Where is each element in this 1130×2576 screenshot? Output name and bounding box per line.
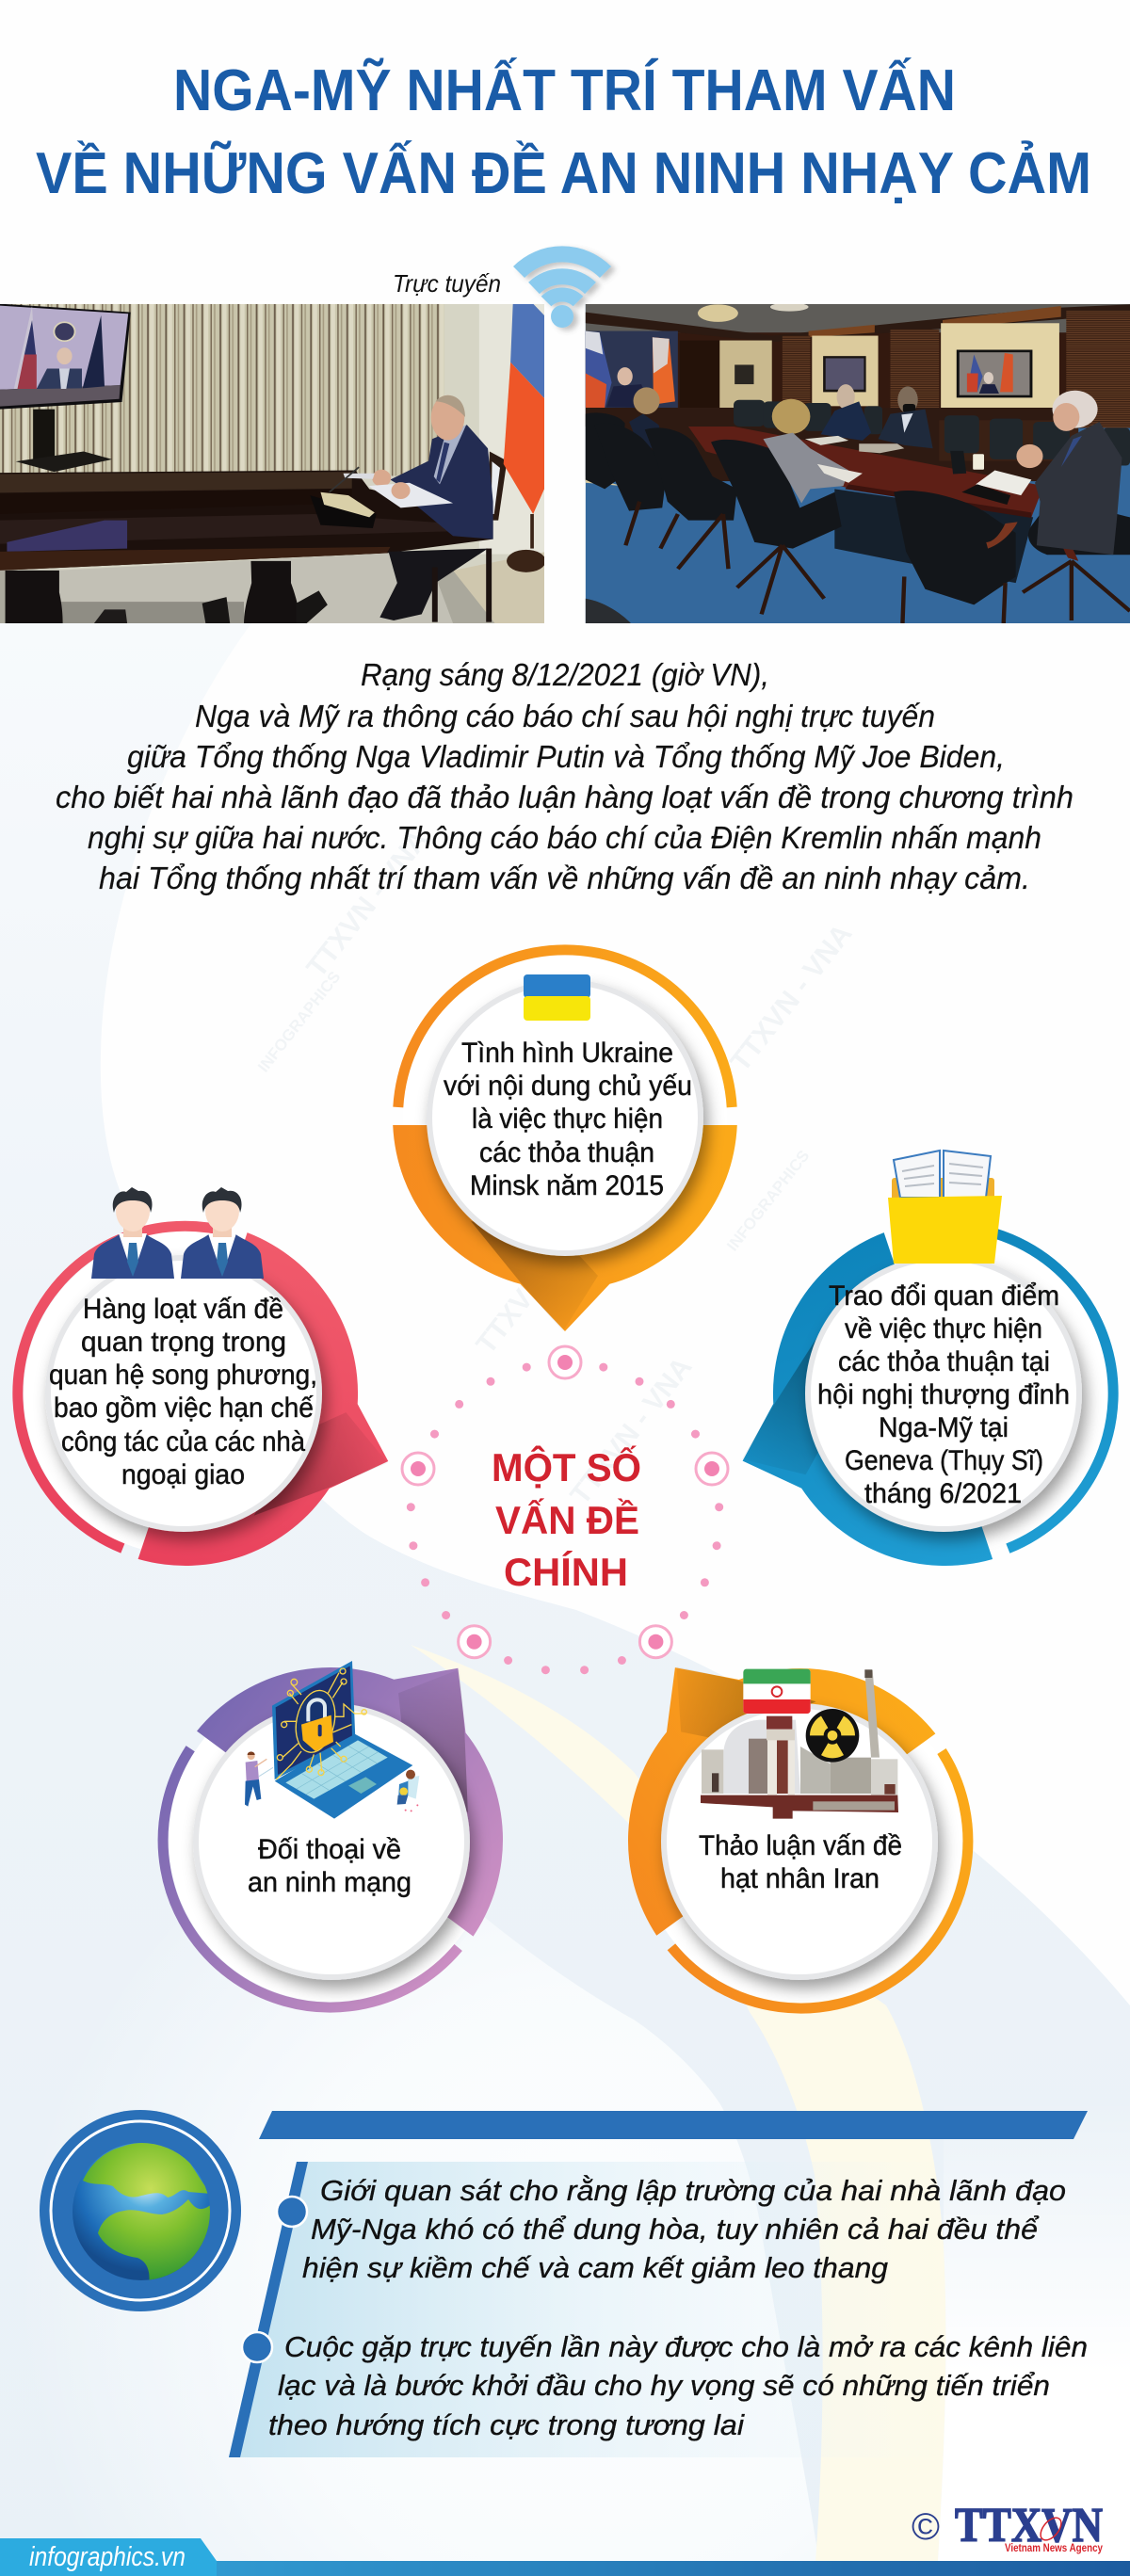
central heading — [492, 1444, 641, 1594]
icon: nuclear plant, Iran flag and radiation sign — [701, 1668, 898, 1819]
text: Ukraine topic: với nội dung chủ yếu — [444, 1071, 692, 1102]
text: Iran topic: Thảo luận vấn đề — [699, 1830, 902, 1861]
watermarks: INFOGRAPHICS — [254, 968, 344, 1075]
intro paragraph — [56, 657, 1074, 895]
photo: Putin at the video conference — [0, 304, 544, 623]
text: first note: Mỹ-Nga khó có thể dung hòa, tuy nhiên cả hai đều thể — [311, 2213, 1040, 2246]
logo: TTXVN — [912, 2499, 1104, 2554]
intro paragraph: cho biết hai nhà lãnh đạo đã thảo luận hàng loạt vấn đề trong chương trình — [56, 780, 1074, 814]
text: Geneva topic: các thỏa thuận tại — [838, 1346, 1050, 1377]
text: cyber topic — [248, 1834, 412, 1898]
text: Ukraine topic: Minsk năm 2015 — [470, 1170, 664, 1201]
icon: two diplomats — [91, 1187, 264, 1279]
watermarks: TTXVN - VNA — [565, 1352, 698, 1510]
watermarks: TTXVN - VNA — [471, 1201, 604, 1360]
text: second note — [268, 2330, 1088, 2441]
text: Geneva topic: Geneva (Thụy Sĩ) — [845, 1445, 1043, 1476]
text: Geneva topic — [817, 1280, 1070, 1509]
text: Geneva topic: Nga-Mỹ tại — [879, 1412, 1009, 1443]
logo: TTXVN: TTXVN — [955, 2499, 1103, 2552]
photo: Biden team in the situation room — [586, 304, 1130, 623]
text: cyber topic: Đối thoại về — [258, 1834, 401, 1865]
text: bilateral topic: ngoại giao — [121, 1459, 245, 1490]
panel: Ukraine — [393, 950, 737, 1331]
watermarks — [254, 825, 858, 1510]
watermarks: TTXVN - VNA — [301, 825, 434, 983]
text: Ukraine topic: các thỏa thuận — [479, 1137, 654, 1168]
intro paragraph: hai Tổng thống nhất trí tham vấn về những vấn đề an ninh nhạy cảm. — [99, 861, 1030, 895]
header bar — [259, 2111, 1088, 2139]
icon: Ukraine flag — [524, 974, 590, 1021]
text: Ukraine topic: là việc thực hiện — [472, 1103, 663, 1135]
icon: laptop with padlock — [245, 1661, 420, 1819]
text: Ukraine topic — [444, 1038, 692, 1201]
text: Iran topic: hạt nhân Iran — [720, 1863, 880, 1894]
text: Geneva topic: về việc thực hiện — [845, 1313, 1042, 1344]
central heading: VẤN ĐỀ — [495, 1498, 639, 1542]
icon: wifi signal — [519, 254, 605, 328]
panel: bilateral relations — [0, 1177, 443, 1624]
watermarks: INFOGRAPHICS — [723, 1147, 813, 1254]
icon: folder with documents — [888, 1151, 1002, 1264]
panel: Geneva summit — [688, 1151, 1130, 1624]
text: bilateral topic: công tác của các nhà — [61, 1426, 305, 1457]
panel: cyber security — [92, 1566, 596, 2077]
intro paragraph: nghị sự giữa hai nước. Thông cáo báo chí của Điện Kremlin nhấn mạnh — [88, 820, 1041, 855]
icon: globe emblem — [40, 2110, 241, 2311]
intro paragraph: giữa Tổng thống Nga Vladimir Putin và Tổng thống Mỹ Joe Biden, — [127, 739, 1005, 774]
title — [36, 58, 1091, 206]
text: second note: Cuộc gặp trực tuyến lần này được cho là mở ra các kênh liên — [284, 2330, 1088, 2363]
watermarks: TTXVN - VNA — [725, 919, 858, 1077]
central dotted ring with markers — [402, 1346, 728, 1674]
text: bilateral topic — [49, 1294, 317, 1490]
title: NGA-MỸ NHẤT TRÍ THAM VẤN — [173, 58, 956, 123]
text: Geneva topic: tháng 6/2021 — [864, 1478, 1022, 1509]
panel: commentary — [229, 2162, 1088, 2457]
panel: Iran nuclear — [536, 1567, 1039, 2078]
central heading: MỘT SỐ — [492, 1444, 641, 1489]
logo: TTXVN: © — [912, 2506, 940, 2548]
text: second note: lạc và là bước khởi đầu cho hy vọng sẽ có những tiến triển — [278, 2369, 1050, 2402]
text: bilateral topic: quan hệ song phương, — [49, 1360, 317, 1391]
text: cyber topic: an ninh mạng — [248, 1867, 412, 1898]
text: Geneva topic: hội nghị thượng đỉnh — [817, 1379, 1070, 1410]
text: Ukraine topic: Tình hình Ukraine — [461, 1038, 673, 1069]
text: first note: Giới quan sát cho rằng lập trường của hai nhà lãnh đạo — [320, 2174, 1066, 2207]
intro paragraph: Nga và Mỹ ra thông cáo báo chí sau hội nghị trực tuyến — [195, 699, 935, 733]
text: bilateral topic: bao gồm việc hạn chế — [54, 1393, 314, 1424]
logo: TTXVN: Vietnam News Agency — [1005, 2543, 1104, 2554]
text: first note — [302, 2174, 1066, 2284]
text: bilateral topic: Hàng loạt vấn đề — [83, 1294, 283, 1325]
text: first note: hiện sự kiềm chế và cam kết giảm leo thang — [302, 2251, 888, 2284]
caption: Trực tuyến: Trực tuyến — [393, 269, 501, 298]
central heading: CHÍNH — [504, 1550, 628, 1594]
text: Geneva topic: Trao đổi quan điểm — [829, 1280, 1059, 1312]
text: second note: theo hướng tích cực trong tương lai — [268, 2408, 745, 2441]
intro paragraph: Rạng sáng 8/12/2021 (giờ VN), — [361, 657, 769, 692]
text: Iran topic — [699, 1830, 902, 1894]
text: bilateral topic: quan trọng trong — [81, 1327, 286, 1358]
footer bar: infographics.vn — [29, 2542, 186, 2572]
footer bar — [0, 2538, 1130, 2576]
